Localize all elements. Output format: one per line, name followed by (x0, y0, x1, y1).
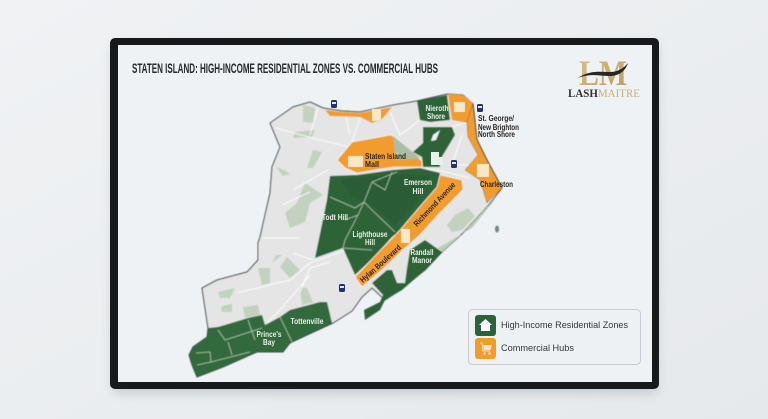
island base land (189, 94, 502, 377)
map labels: Staten Island (365, 152, 406, 161)
logo: Lash Maitre: LM (579, 53, 627, 93)
icon: orange cart (475, 338, 496, 359)
central high-income zone: Todt Hill, Emerson Hill, Lighthouse Hill (315, 168, 440, 275)
legend label: Commercial Hubs (501, 343, 574, 354)
map labels: Emerson (404, 178, 432, 187)
small island (495, 226, 499, 232)
legend (468, 310, 640, 364)
map labels: St. George/ (478, 114, 515, 123)
icon: commercial buildings (348, 102, 489, 243)
map labels: Richmond Avenue (412, 180, 458, 228)
map labels: Shore (427, 112, 445, 121)
map labels: Bay (263, 338, 275, 347)
pale green parks (218, 105, 498, 318)
south shore high-income zone: Tottenville, Prince's Bay (189, 302, 332, 377)
hill shading (340, 174, 430, 225)
legend label: High-Income Residential Zones (501, 320, 628, 331)
map labels: Hill (412, 187, 424, 196)
map labels: Manor (412, 256, 432, 265)
icon: transit bus markers (331, 100, 483, 292)
map labels: New Brighton (478, 123, 519, 132)
map labels: Hylan Boulevard (358, 243, 403, 284)
map labels: Randall (410, 248, 434, 257)
Staten Island Mall commercial area (337, 135, 422, 173)
Randall Manor high-income zone (364, 240, 442, 320)
map labels: Nieroth (426, 104, 449, 113)
sage park beside mall (393, 136, 420, 160)
logo: Lash Maitre (568, 53, 640, 100)
icon: office building (431, 152, 443, 165)
map labels: Hill (365, 238, 375, 247)
north shore commercial strip (325, 107, 392, 123)
map labels: Charleston (480, 180, 513, 189)
Charleston commercial strip (465, 103, 502, 203)
road network (237, 108, 470, 323)
north shore high-income zone (417, 95, 450, 122)
monitor frame (110, 38, 659, 389)
screen panel (118, 45, 652, 382)
map labels: Lighthouse (352, 230, 388, 239)
icon: green house (475, 315, 496, 336)
map labels (256, 104, 519, 347)
logo: Lash Maitre: LASHMAITRE (568, 88, 640, 100)
title: STATEN ISLAND: HIGH-INCOME RESIDENTIAL ZONES VS. COMMERCIAL HUBS (132, 60, 438, 76)
map labels: Todt Hill (322, 213, 348, 222)
coast outline (473, 104, 502, 188)
district boundaries (330, 172, 397, 250)
north-east commercial block (448, 94, 473, 123)
map labels: Prince's (256, 330, 282, 339)
map: Staten Island (189, 94, 502, 377)
map labels: North Shore (478, 130, 515, 139)
map labels: Tottenville (290, 317, 324, 326)
Hylan Boulevard and Richmond Avenue commercial corridor (355, 175, 463, 287)
map labels: Mall (365, 160, 379, 169)
